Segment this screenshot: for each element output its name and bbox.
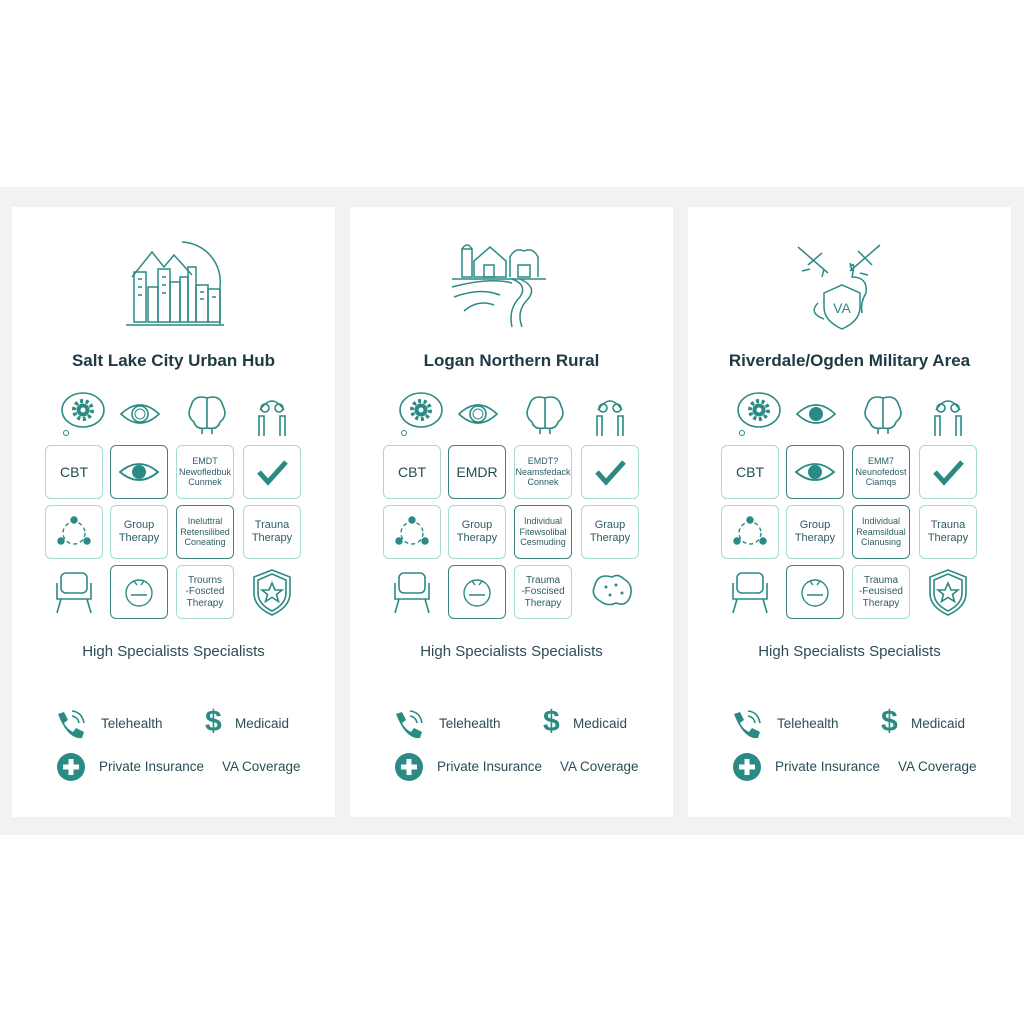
tile: Group Therapy: Group bbox=[462, 519, 492, 531]
tile: Individual bbox=[176, 505, 234, 559]
tile: Trauma-Focused bbox=[514, 565, 572, 619]
tile: Trauma Therapy bbox=[243, 505, 301, 559]
tile: EMMT bbox=[852, 445, 910, 499]
tile: Group Therapy: Therapy bbox=[119, 532, 159, 544]
icon: thought gear bbox=[737, 392, 781, 436]
tile: Trauma Therapy: Trauna bbox=[931, 519, 965, 531]
tile: faces bbox=[110, 565, 168, 619]
tile: Individual bbox=[852, 505, 910, 559]
text: Medicaid: Medicaid bbox=[573, 716, 627, 731]
tile: Individual bbox=[514, 505, 572, 559]
tile: Graup Therapy bbox=[581, 505, 639, 559]
tile: CBT bbox=[383, 445, 441, 499]
icon: chair bbox=[56, 572, 92, 614]
tile: Individual: Cesmuding bbox=[520, 537, 566, 547]
tile: EMDT: Connek bbox=[527, 477, 559, 487]
icon: chair bbox=[732, 572, 768, 614]
tile: faces bbox=[786, 565, 844, 619]
tile: EMDT bbox=[514, 445, 572, 499]
tile: EMDT: Cunmek bbox=[188, 477, 222, 487]
tile: Individual: Coneating bbox=[184, 537, 226, 547]
icon: thought gear bbox=[61, 392, 105, 436]
tile: Individual: Cianusing bbox=[861, 537, 901, 547]
icon: jets and VA shield bbox=[798, 244, 880, 330]
icon: city skyline bbox=[126, 241, 224, 326]
tile: CBT: CBT bbox=[736, 464, 764, 480]
tile: Group Therapy: Group bbox=[124, 519, 154, 531]
tile: Trauma-Focused: Therapy bbox=[863, 598, 899, 609]
tile: check bbox=[919, 445, 977, 499]
title: Logan Northern Rural bbox=[424, 351, 599, 370]
text: VA Coverage: VA Coverage bbox=[222, 759, 301, 774]
tile: Trauma-Focused: -Feusised bbox=[859, 586, 903, 597]
text: VA Coverage: VA Coverage bbox=[560, 759, 639, 774]
icon: plus circle bbox=[57, 753, 85, 781]
icon: phone bbox=[58, 710, 85, 738]
icon: jets and VA shield: VA bbox=[833, 300, 851, 316]
icon: support people bbox=[596, 400, 624, 436]
panel: Logan bbox=[350, 207, 673, 817]
tile: Group Therapy bbox=[786, 505, 844, 559]
tile: Trauma-Focused: Therapy bbox=[525, 598, 561, 609]
tile: Trauma-Focused bbox=[176, 565, 234, 619]
tile: Individual: Individual bbox=[862, 516, 900, 526]
icon: shield star bbox=[253, 569, 291, 616]
text: Private Insurance: Private Insurance bbox=[437, 759, 542, 774]
icon: dollar: $ bbox=[881, 705, 898, 738]
panel: Salt Lake City bbox=[12, 207, 335, 817]
icon: brain bbox=[188, 396, 226, 434]
icon: plus circle bbox=[395, 753, 423, 781]
icon: brain small bbox=[592, 574, 632, 606]
icon: farm bbox=[452, 244, 546, 328]
icon: eye bbox=[458, 404, 498, 424]
tile: CBT bbox=[721, 445, 779, 499]
tile: Group Therapy: Therapy bbox=[795, 532, 835, 544]
icon: shield star bbox=[929, 569, 967, 616]
title: Riverdale/Ogden Military Area bbox=[729, 351, 970, 370]
tile: Group Therapy bbox=[110, 505, 168, 559]
tile: CBT: CBT bbox=[60, 464, 88, 480]
tile: EMDT bbox=[176, 445, 234, 499]
icon: brain bbox=[526, 396, 564, 434]
text: Private Insurance: Private Insurance bbox=[99, 759, 204, 774]
tile: Trauma-Focused: Trourns bbox=[188, 575, 222, 586]
icon: chair bbox=[394, 572, 430, 614]
tile: EMMT: Neunofedost bbox=[855, 467, 907, 477]
text: Telehealth: Telehealth bbox=[101, 716, 163, 731]
tile: Trauma-Focused: -Foscted bbox=[186, 586, 224, 597]
tile: EMDR: EMDR bbox=[456, 464, 498, 480]
tile: EMDR bbox=[448, 445, 506, 499]
title: Salt Lake City Urban Hub bbox=[72, 351, 275, 370]
tile: Trauma Therapy bbox=[919, 505, 977, 559]
tile: group circle bbox=[45, 505, 103, 559]
tile: Group Therapy: Group bbox=[800, 519, 830, 531]
icon: eye bbox=[796, 404, 836, 424]
tile: EMDT: EMDT bbox=[192, 456, 218, 466]
tile: Individual: Reamsildual bbox=[856, 527, 906, 537]
tile: Trauma-Focused: Trauma bbox=[526, 575, 560, 586]
tile: check bbox=[581, 445, 639, 499]
icon: dollar: $ bbox=[543, 705, 560, 738]
text: specialists: High Specialists Specialists bbox=[82, 643, 265, 660]
icon: dollar: $ bbox=[205, 705, 222, 738]
icon: support people bbox=[258, 400, 286, 436]
tile: Group Therapy: Therapy bbox=[457, 532, 497, 544]
tile: Trauma Therapy: Trauna bbox=[255, 519, 289, 531]
tile: Individual: Retensilibed bbox=[180, 527, 230, 537]
tile: check bbox=[243, 445, 301, 499]
tile: Individual: Individual bbox=[524, 516, 562, 526]
panel: Riverdale/Ogden bbox=[688, 207, 1011, 817]
tile: Trauma-Focused bbox=[852, 565, 910, 619]
icon: plus circle bbox=[733, 753, 761, 781]
tile: group circle bbox=[383, 505, 441, 559]
icon: phone bbox=[396, 710, 423, 738]
tile: EMDT: Newofledbuk bbox=[179, 467, 231, 477]
text: specialists: High Specialists Specialists bbox=[758, 643, 941, 660]
icon: phone bbox=[734, 710, 761, 738]
tile: Individual: Fitewsolibal bbox=[519, 527, 567, 537]
icon: support people bbox=[934, 400, 962, 436]
tile: EMDT: EMDT? bbox=[528, 456, 558, 466]
tile: EMDT: Neamsfedack bbox=[515, 467, 571, 477]
tile: CBT: CBT bbox=[398, 464, 426, 480]
text: specialists: High Specialists Specialists bbox=[420, 643, 603, 660]
text: Medicaid: Medicaid bbox=[911, 716, 965, 731]
text: Telehealth: Telehealth bbox=[777, 716, 839, 731]
tile: CBT bbox=[45, 445, 103, 499]
tile: faces bbox=[448, 565, 506, 619]
text: Private Insurance: Private Insurance bbox=[775, 759, 880, 774]
icon: eye bbox=[120, 404, 160, 424]
tile: Individual: Ineluttral bbox=[188, 516, 222, 526]
tile: Group Therapy bbox=[448, 505, 506, 559]
tile: EMMT: Ciamqs bbox=[866, 477, 896, 487]
tile: Trauma-Focused: Trauma bbox=[864, 575, 898, 586]
text: Telehealth: Telehealth bbox=[439, 716, 501, 731]
tile: Trauma Therapy: Therapy bbox=[252, 532, 292, 544]
text: Medicaid: Medicaid bbox=[235, 716, 289, 731]
tile: EMMT: EMM7 bbox=[868, 456, 894, 466]
tile: Trauma-Focused: -Foscised bbox=[521, 586, 565, 597]
tile: Trauma-Focused: Therapy bbox=[187, 598, 223, 609]
icon: thought gear bbox=[399, 392, 443, 436]
text: VA Coverage: VA Coverage bbox=[898, 759, 977, 774]
tile: Graup Therapy: Graup bbox=[595, 519, 625, 531]
tile: Graup Therapy: Therapy bbox=[590, 532, 630, 544]
tile: Trauma Therapy: Therapy bbox=[928, 532, 968, 544]
tile: group circle bbox=[721, 505, 779, 559]
tile: eye bbox=[110, 445, 168, 499]
tile: eye bbox=[786, 445, 844, 499]
icon: brain bbox=[864, 396, 902, 434]
